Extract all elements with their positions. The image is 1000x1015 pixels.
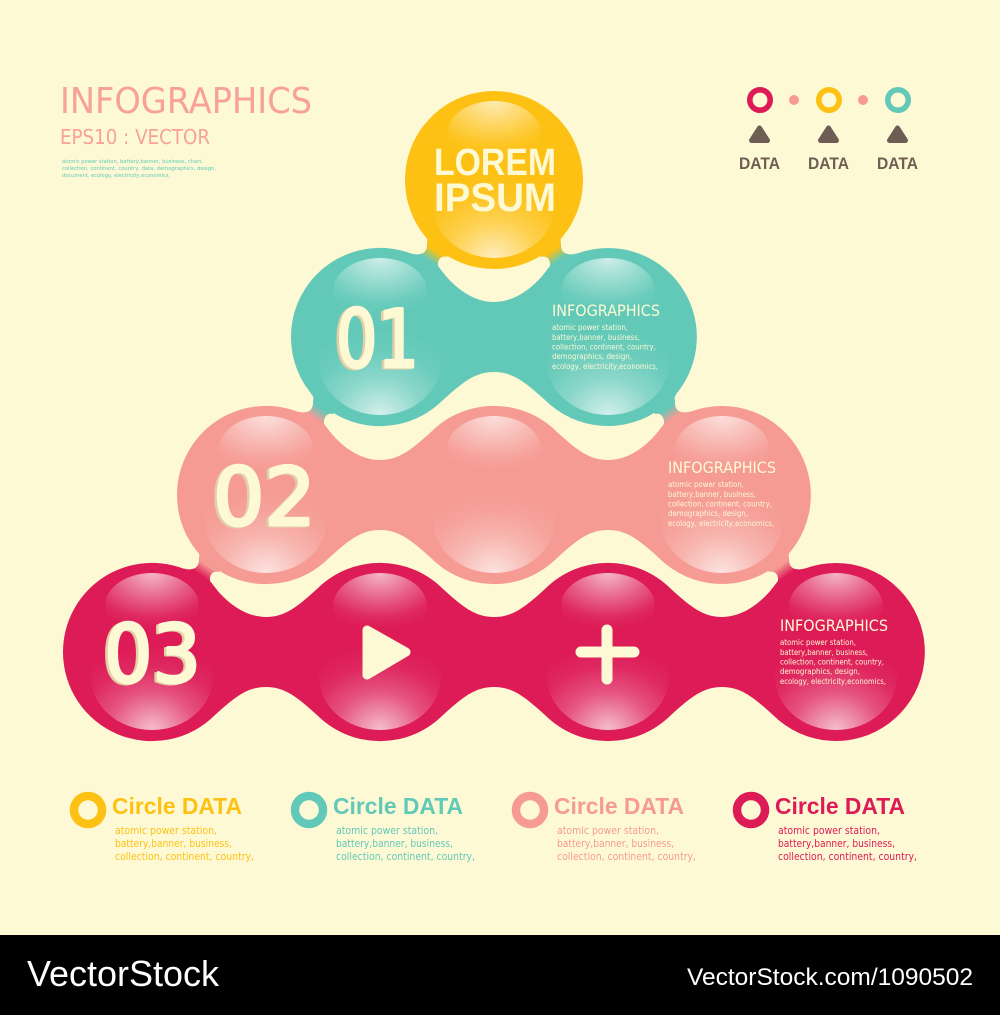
ring: yellow bbox=[819, 90, 839, 110]
text block: ecology, electricity,economics, bbox=[780, 677, 886, 686]
legend: top right data markers bbox=[739, 90, 918, 173]
neck right bbox=[538, 235, 577, 275]
title description bbox=[62, 159, 216, 179]
gloss nodes bbox=[319, 258, 669, 415]
tier 1: teal band bbox=[291, 235, 697, 426]
legend item: crimson: atomic power station, bbox=[778, 825, 880, 837]
number 03: 03 bbox=[104, 608, 201, 701]
legend item: yellow: Circle DATA bbox=[112, 793, 242, 819]
text block: demographics, design, bbox=[780, 667, 860, 676]
triangle marker bbox=[820, 128, 836, 140]
band shape bbox=[177, 401, 811, 584]
legend item: crimson bbox=[737, 793, 917, 863]
neck left bbox=[411, 235, 450, 275]
tier 2: pink band bbox=[177, 393, 811, 584]
legend item: pink bbox=[516, 793, 696, 863]
text block: INFOGRAPHICS bbox=[668, 458, 776, 477]
legend item: pink: collection, continent, country, bbox=[557, 851, 696, 863]
footer url: VectorStock.com/1090502 bbox=[687, 964, 973, 991]
text block bbox=[552, 301, 660, 371]
text block: battery,banner, business, bbox=[668, 490, 756, 499]
legend item: yellow: battery,banner, business, bbox=[115, 838, 232, 850]
text block: ecology, electricity,economics, bbox=[668, 519, 774, 528]
title description: document, ecology, electricity,economics, bbox=[62, 173, 170, 179]
triangle marker bbox=[752, 128, 768, 140]
black strip bbox=[0, 935, 1000, 1015]
top circle: lorem ipsum bbox=[405, 91, 583, 269]
gloss top bbox=[447, 101, 541, 167]
text block: ecology, electricity,economics, bbox=[552, 362, 658, 371]
legend item: pink: battery,banner, business, bbox=[557, 838, 674, 850]
text block bbox=[668, 458, 776, 528]
legend item: teal: Circle DATA bbox=[333, 793, 463, 819]
number 02: 02 bbox=[213, 451, 316, 544]
text block: atomic power station, bbox=[552, 323, 628, 332]
text block: INFOGRAPHICS bbox=[780, 616, 888, 635]
data labels: DATA bbox=[808, 154, 849, 173]
title description: collection, continent, country, data, demographics, design, bbox=[62, 166, 216, 172]
legend item: teal: collection, continent, country, bbox=[336, 851, 475, 863]
band shape bbox=[291, 243, 697, 426]
legend item: teal: atomic power station, bbox=[336, 825, 438, 837]
dot bbox=[789, 95, 799, 105]
title block bbox=[60, 81, 312, 179]
legend item: crimson: Circle DATA bbox=[775, 793, 905, 819]
legend item: pink: atomic power station, bbox=[557, 825, 659, 837]
text block: demographics, design, bbox=[668, 509, 748, 518]
text block: collection, continent, country, bbox=[552, 342, 656, 352]
data labels: DATA bbox=[877, 154, 918, 173]
footer bar bbox=[0, 935, 1000, 1015]
text block: INFOGRAPHICS bbox=[552, 301, 660, 320]
dot bbox=[858, 95, 868, 105]
footer brand: VectorStock bbox=[27, 953, 220, 994]
neck left bbox=[183, 550, 222, 590]
legend item: crimson: battery,banner, business, bbox=[778, 838, 895, 850]
yellow disc bbox=[405, 91, 583, 269]
text block bbox=[780, 616, 888, 686]
ring: crimson bbox=[750, 90, 770, 110]
icon: plus bbox=[581, 630, 634, 679]
gloss nodes bbox=[91, 573, 897, 730]
text block: atomic power station, bbox=[780, 638, 856, 647]
text block: atomic power station, bbox=[668, 480, 744, 489]
data labels: DATA bbox=[739, 154, 780, 173]
ring: teal bbox=[888, 90, 908, 110]
title description: atomic power station, battery,banner, business, chart, bbox=[62, 159, 203, 165]
legend item: teal bbox=[295, 793, 475, 863]
data labels bbox=[739, 154, 918, 173]
legend item: pink: Circle DATA bbox=[554, 793, 684, 819]
neck right bbox=[652, 393, 691, 433]
subtitle: EPS10 : VECTOR bbox=[60, 125, 210, 149]
triangle marker bbox=[890, 128, 906, 140]
legend item: yellow: atomic power station, bbox=[115, 825, 217, 837]
text block: demographics, design, bbox=[552, 352, 632, 361]
legend item: teal: battery,banner, business, bbox=[336, 838, 453, 850]
bottom legend bbox=[74, 793, 917, 863]
legend item: yellow bbox=[74, 793, 254, 863]
legend item: yellow: collection, continent, country, bbox=[115, 851, 254, 863]
text block: battery,banner, business, bbox=[780, 648, 868, 657]
gloss nodes bbox=[205, 416, 783, 573]
neck right bbox=[766, 550, 805, 590]
heading line 2: IPSUM bbox=[434, 176, 556, 220]
neck left bbox=[297, 393, 336, 433]
gloss bottom bbox=[433, 152, 555, 258]
band shape bbox=[63, 558, 925, 741]
number 01: 01 bbox=[336, 293, 419, 386]
text block: battery,banner, business, bbox=[552, 333, 640, 342]
text block: collection, continent, country, bbox=[780, 658, 884, 666]
icon: play bbox=[367, 630, 406, 675]
legend item: crimson: collection, continent, country, bbox=[778, 851, 917, 863]
title: INFOGRAPHICS bbox=[60, 81, 312, 122]
tier 3: crimson band bbox=[63, 550, 925, 741]
heading: LOREM bbox=[434, 142, 556, 184]
text block: collection, continent, country, bbox=[668, 500, 772, 508]
